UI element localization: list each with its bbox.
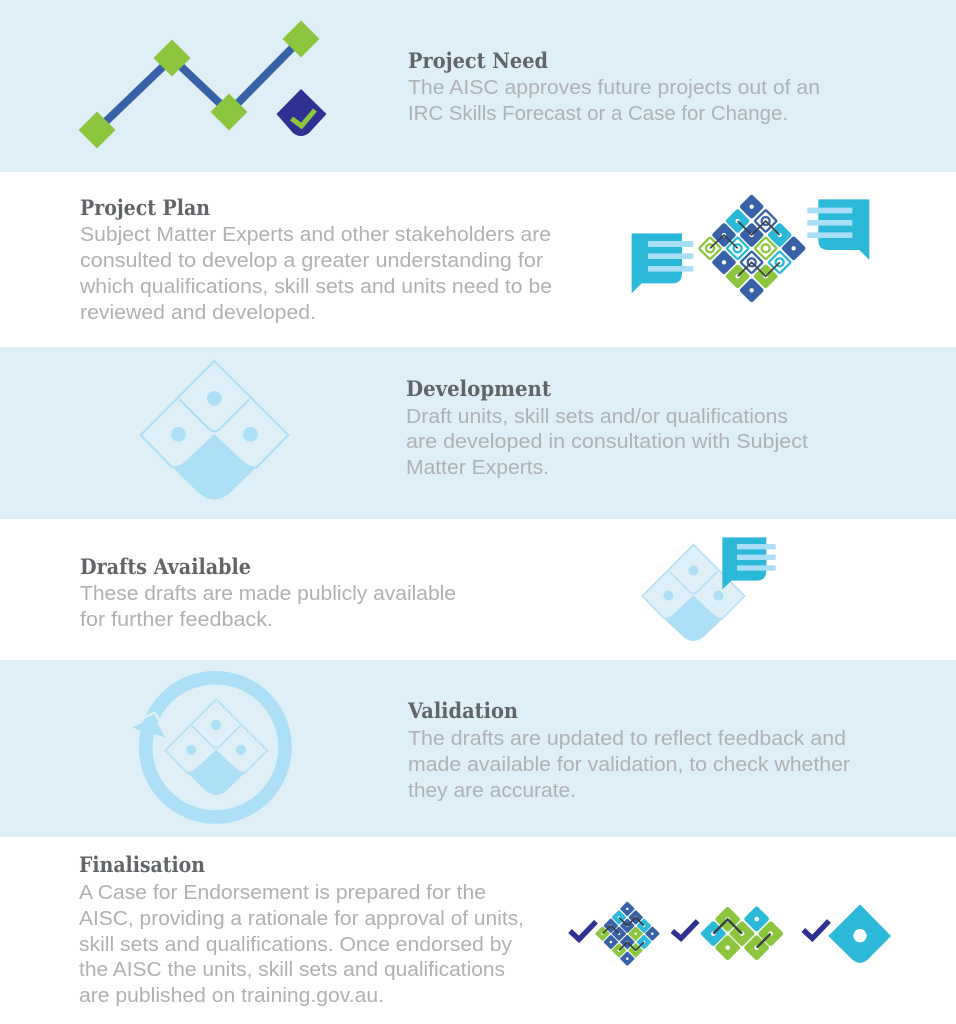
text: development [406, 406, 808, 479]
text: validation: they are accurate. [408, 780, 576, 802]
heading: development: Development [406, 377, 551, 402]
icon: diamond in circular arrow [132, 678, 285, 817]
icon: tick and single diamond [803, 904, 891, 963]
heading: project need: Project Need [408, 49, 548, 74]
text: project plan: reviewed and developed. [80, 302, 316, 324]
heading: drafts available: Drafts Available [80, 555, 251, 580]
text: drafts available [80, 583, 456, 631]
text: validation [408, 728, 850, 802]
text: development: Matter Experts. [406, 457, 549, 479]
text: drafts available: for further feedback. [80, 609, 273, 631]
text: drafts available: These drafts are made publicly available [80, 583, 456, 605]
icon: development diamond [141, 361, 288, 500]
text: development: are developed in consultation with Subject [406, 431, 808, 453]
text: project plan: Subject Matter Experts and other stakeholders are [80, 224, 551, 246]
icon: tick and full grid [570, 901, 660, 966]
panel: drafts available [0, 519, 956, 660]
panel: development [0, 347, 956, 519]
text: validation: made available for validation, to check whether [408, 754, 850, 776]
text: project need: The AISC approves future projects out of an [408, 77, 820, 99]
text: finalisation: AISC, providing a rationale for approval of units, [79, 908, 524, 930]
text: project plan [79, 224, 552, 324]
text: project need [408, 77, 820, 125]
panel: finalisation [0, 837, 956, 1024]
icon: line chart with check [78, 20, 326, 148]
text: validation: The drafts are updated to reflect feedback and [408, 728, 846, 750]
text: project need: IRC Skills Forecast or a Case for Change. [408, 103, 788, 125]
panel: validation [0, 660, 956, 837]
heading: project plan: Project Plan [80, 196, 210, 221]
icon: speech bubbles and diamond grid [632, 194, 869, 303]
icon: ticked outcomes [570, 901, 891, 966]
text: project plan: consulted to develop a greater understanding for [80, 250, 543, 272]
heading: validation: Validation [407, 699, 518, 724]
text: development: Draft units, skill sets and/or qualifications [406, 406, 788, 428]
heading: finalisation: Finalisation [79, 853, 205, 878]
text: finalisation: the AISC the units, skill sets and qualifications [79, 959, 505, 981]
text: finalisation [79, 882, 524, 1007]
panel: project need [0, 0, 956, 172]
text: finalisation: A Case for Endorsement is prepared for the [79, 882, 486, 904]
text: finalisation: are published on training.gov.au. [79, 985, 384, 1007]
icon: tick and partial grid [672, 906, 784, 961]
panel: project plan [0, 172, 956, 347]
text: finalisation: skill sets and qualifications. Once endorsed by [79, 934, 512, 956]
text: project plan: which qualifications, skill sets and units need to be [79, 276, 552, 298]
icon: diamond with speech bubble [642, 537, 776, 641]
